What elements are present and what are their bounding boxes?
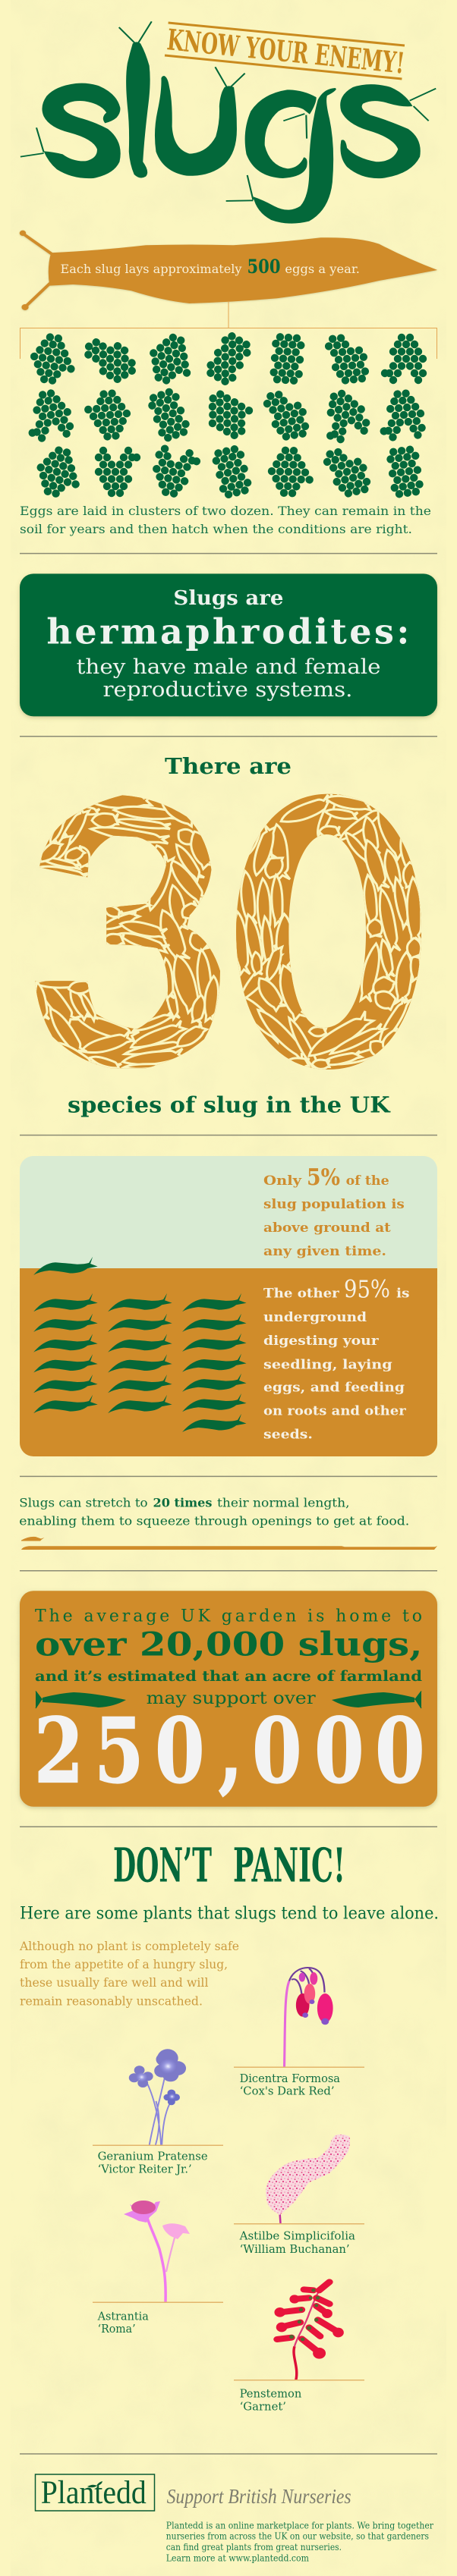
- astilbe label: [239, 2231, 355, 2256]
- eggs caption: soil for years and then hatch when the conditions are right.: [20, 523, 412, 536]
- heading: don't panic: [113, 1838, 345, 1893]
- five percent text: any given time.: [263, 1244, 386, 1259]
- geranium illustration: [129, 2049, 186, 2145]
- ninety-five percent text: 95%: [344, 1275, 390, 1304]
- dicentra baseline: [234, 2066, 364, 2068]
- ninety-five percent text: underground: [263, 1310, 367, 1325]
- population text: and it’s estimated that an acre of farmland: [35, 1668, 422, 1685]
- egg clusters: [27, 332, 423, 498]
- astrantia label: ‘Roma’: [98, 2323, 136, 2336]
- underground band: [20, 1268, 437, 1456]
- astilbe stem: [279, 2213, 281, 2223]
- five percent text: 5%: [307, 1164, 340, 1191]
- population text: may support over: [147, 1689, 316, 1708]
- geranium label: [98, 2150, 208, 2175]
- small slug right: [332, 1692, 421, 1708]
- hermaphrodites text: Slugs are: [173, 587, 283, 610]
- stretch fact text: enabling them to squeeze through openings to get at food.: [19, 1514, 409, 1528]
- digit 0: [231, 793, 422, 1073]
- ninety-five percent text: seeds.: [263, 1427, 313, 1442]
- hermaphrodites text: they have male and female: [77, 655, 381, 679]
- dicentra label: [240, 2073, 340, 2098]
- letter g: [226, 88, 336, 224]
- astrantia baseline: [93, 2301, 223, 2303]
- heading: don't panic: DON’T: [113, 1838, 212, 1893]
- hermaphrodites text: hermaphrodites:: [46, 611, 409, 652]
- geranium baseline: [93, 2145, 223, 2146]
- orange slug with egg count: [20, 231, 437, 310]
- five percent text: above ground at: [263, 1220, 391, 1236]
- plant: penstemon: [234, 2282, 364, 2413]
- letter s right: [340, 84, 436, 178]
- ninety-five percent text: The other: [263, 1286, 340, 1302]
- five percent text: Only: [263, 1173, 302, 1189]
- panel: above and below ground: [20, 1156, 437, 1456]
- penstemon label: ‘Garnet’: [240, 2401, 286, 2413]
- letter u: [155, 67, 245, 176]
- population text: The average UK garden is home to: [35, 1607, 422, 1626]
- big number: 250,000: [34, 1699, 425, 1804]
- eggs caption: Eggs are laid in clusters of two dozen. They can remain in the: [20, 504, 431, 518]
- astrantia label: [97, 2311, 149, 2336]
- tagline: Support British Nurseries: [167, 2485, 351, 2508]
- ninety-five percent text: on roots and other: [263, 1404, 407, 1419]
- egg count text: eggs a year.: [285, 262, 360, 276]
- astrantia illustration: [124, 2201, 190, 2302]
- geranium label: ‘Victor Reiter Jr.’: [98, 2163, 192, 2175]
- slug body: [20, 231, 437, 310]
- dicentra label: Dicentra Formosa: [240, 2073, 340, 2085]
- ninety-five percent text: is: [396, 1286, 410, 1302]
- egg count text: [61, 256, 360, 278]
- caption: species of slug: species of slug in the UK: [68, 1092, 391, 1118]
- intro paragraph: remain reasonably unscathed.: [20, 1994, 203, 2008]
- hermaphrodites text: reproductive systems.: [103, 678, 352, 702]
- hermaphrodites text: [46, 587, 409, 702]
- green slug rows: [33, 1257, 247, 1432]
- astrantia label: Astrantia: [97, 2311, 149, 2323]
- panel: hermaphrodites: [20, 573, 437, 716]
- penstemon label: Penstemon: [240, 2389, 301, 2401]
- ninety-five percent text: seedling, laying: [263, 1357, 392, 1372]
- heading: there are: There are: [165, 753, 292, 779]
- five percent text: [263, 1164, 405, 1259]
- five percent text: slug population is: [263, 1197, 405, 1212]
- ninety-five percent text: digesting your: [263, 1334, 380, 1349]
- stretched slug illustration: [21, 1537, 437, 1550]
- ninety-five percent text: eggs, and feeding: [263, 1381, 405, 1396]
- heading: don't panic: PANIC!: [233, 1838, 345, 1893]
- intro paragraph: from the appetite of a hungry slug,: [20, 1958, 228, 1971]
- population text: [35, 1607, 423, 1708]
- penstemon label: [240, 2389, 301, 2413]
- plant: astilbe simplicifolia: [234, 2135, 364, 2256]
- small slug left: [36, 1692, 126, 1708]
- stretch fact text: their normal length,: [217, 1495, 350, 1509]
- stretch fact text: Slugs can stretch to: [19, 1495, 148, 1509]
- footer text: Learn more at www.plantedd.com: [166, 2552, 309, 2564]
- egg count text: Each slug lays approximately: [61, 262, 242, 276]
- stretch fact text: 20 times: [153, 1495, 213, 1509]
- astilbe label: ‘William Buchanan’: [240, 2244, 350, 2256]
- astilbe plume: [266, 2135, 350, 2215]
- astilbe label: Astilbe Simplicifolia: [239, 2231, 355, 2243]
- ninety-five percent text: [263, 1275, 410, 1442]
- population text: over 20,000 slugs,: [35, 1626, 423, 1664]
- footer text: can find great plants from great nurseries.: [166, 2541, 342, 2552]
- penstemon illustration: [274, 2282, 344, 2380]
- letter l: [119, 21, 152, 177]
- stretch fact text: [19, 1495, 409, 1528]
- letter s: [20, 83, 121, 178]
- eggs caption: [20, 504, 431, 536]
- intro paragraph: these usually fare well and will: [20, 1976, 209, 1990]
- title: slugs lettering: [20, 21, 436, 224]
- intro paragraph: Although no plant is completely safe: [19, 1940, 239, 1953]
- dicentra label: ‘Cox's Dark Red’: [240, 2086, 335, 2098]
- plant: astrantia: [93, 2201, 223, 2336]
- logo: plantedd: Plantedd: [41, 2475, 147, 2511]
- egg count text: 500: [247, 256, 281, 278]
- footer text: [166, 2519, 433, 2564]
- panel: slug population: [20, 1591, 437, 1807]
- plant: dicentra formosa: [234, 1968, 364, 2098]
- dicentra illustration: [284, 1968, 333, 2067]
- digit 3: [32, 793, 220, 1070]
- subheading: plants: Here are some plants that slugs tend to leave alone.: [20, 1904, 439, 1923]
- bracket connecting slug to eggs: [20, 302, 437, 359]
- number 30 made of slugs: [29, 791, 426, 1073]
- above ground band: [20, 1156, 437, 1268]
- intro paragraph: [19, 1940, 239, 2008]
- astilbe baseline: [234, 2223, 364, 2224]
- five percent text: of the: [346, 1173, 389, 1189]
- plant: geranium pratense: [93, 2049, 223, 2175]
- geranium label: Geranium Pratense: [98, 2150, 208, 2163]
